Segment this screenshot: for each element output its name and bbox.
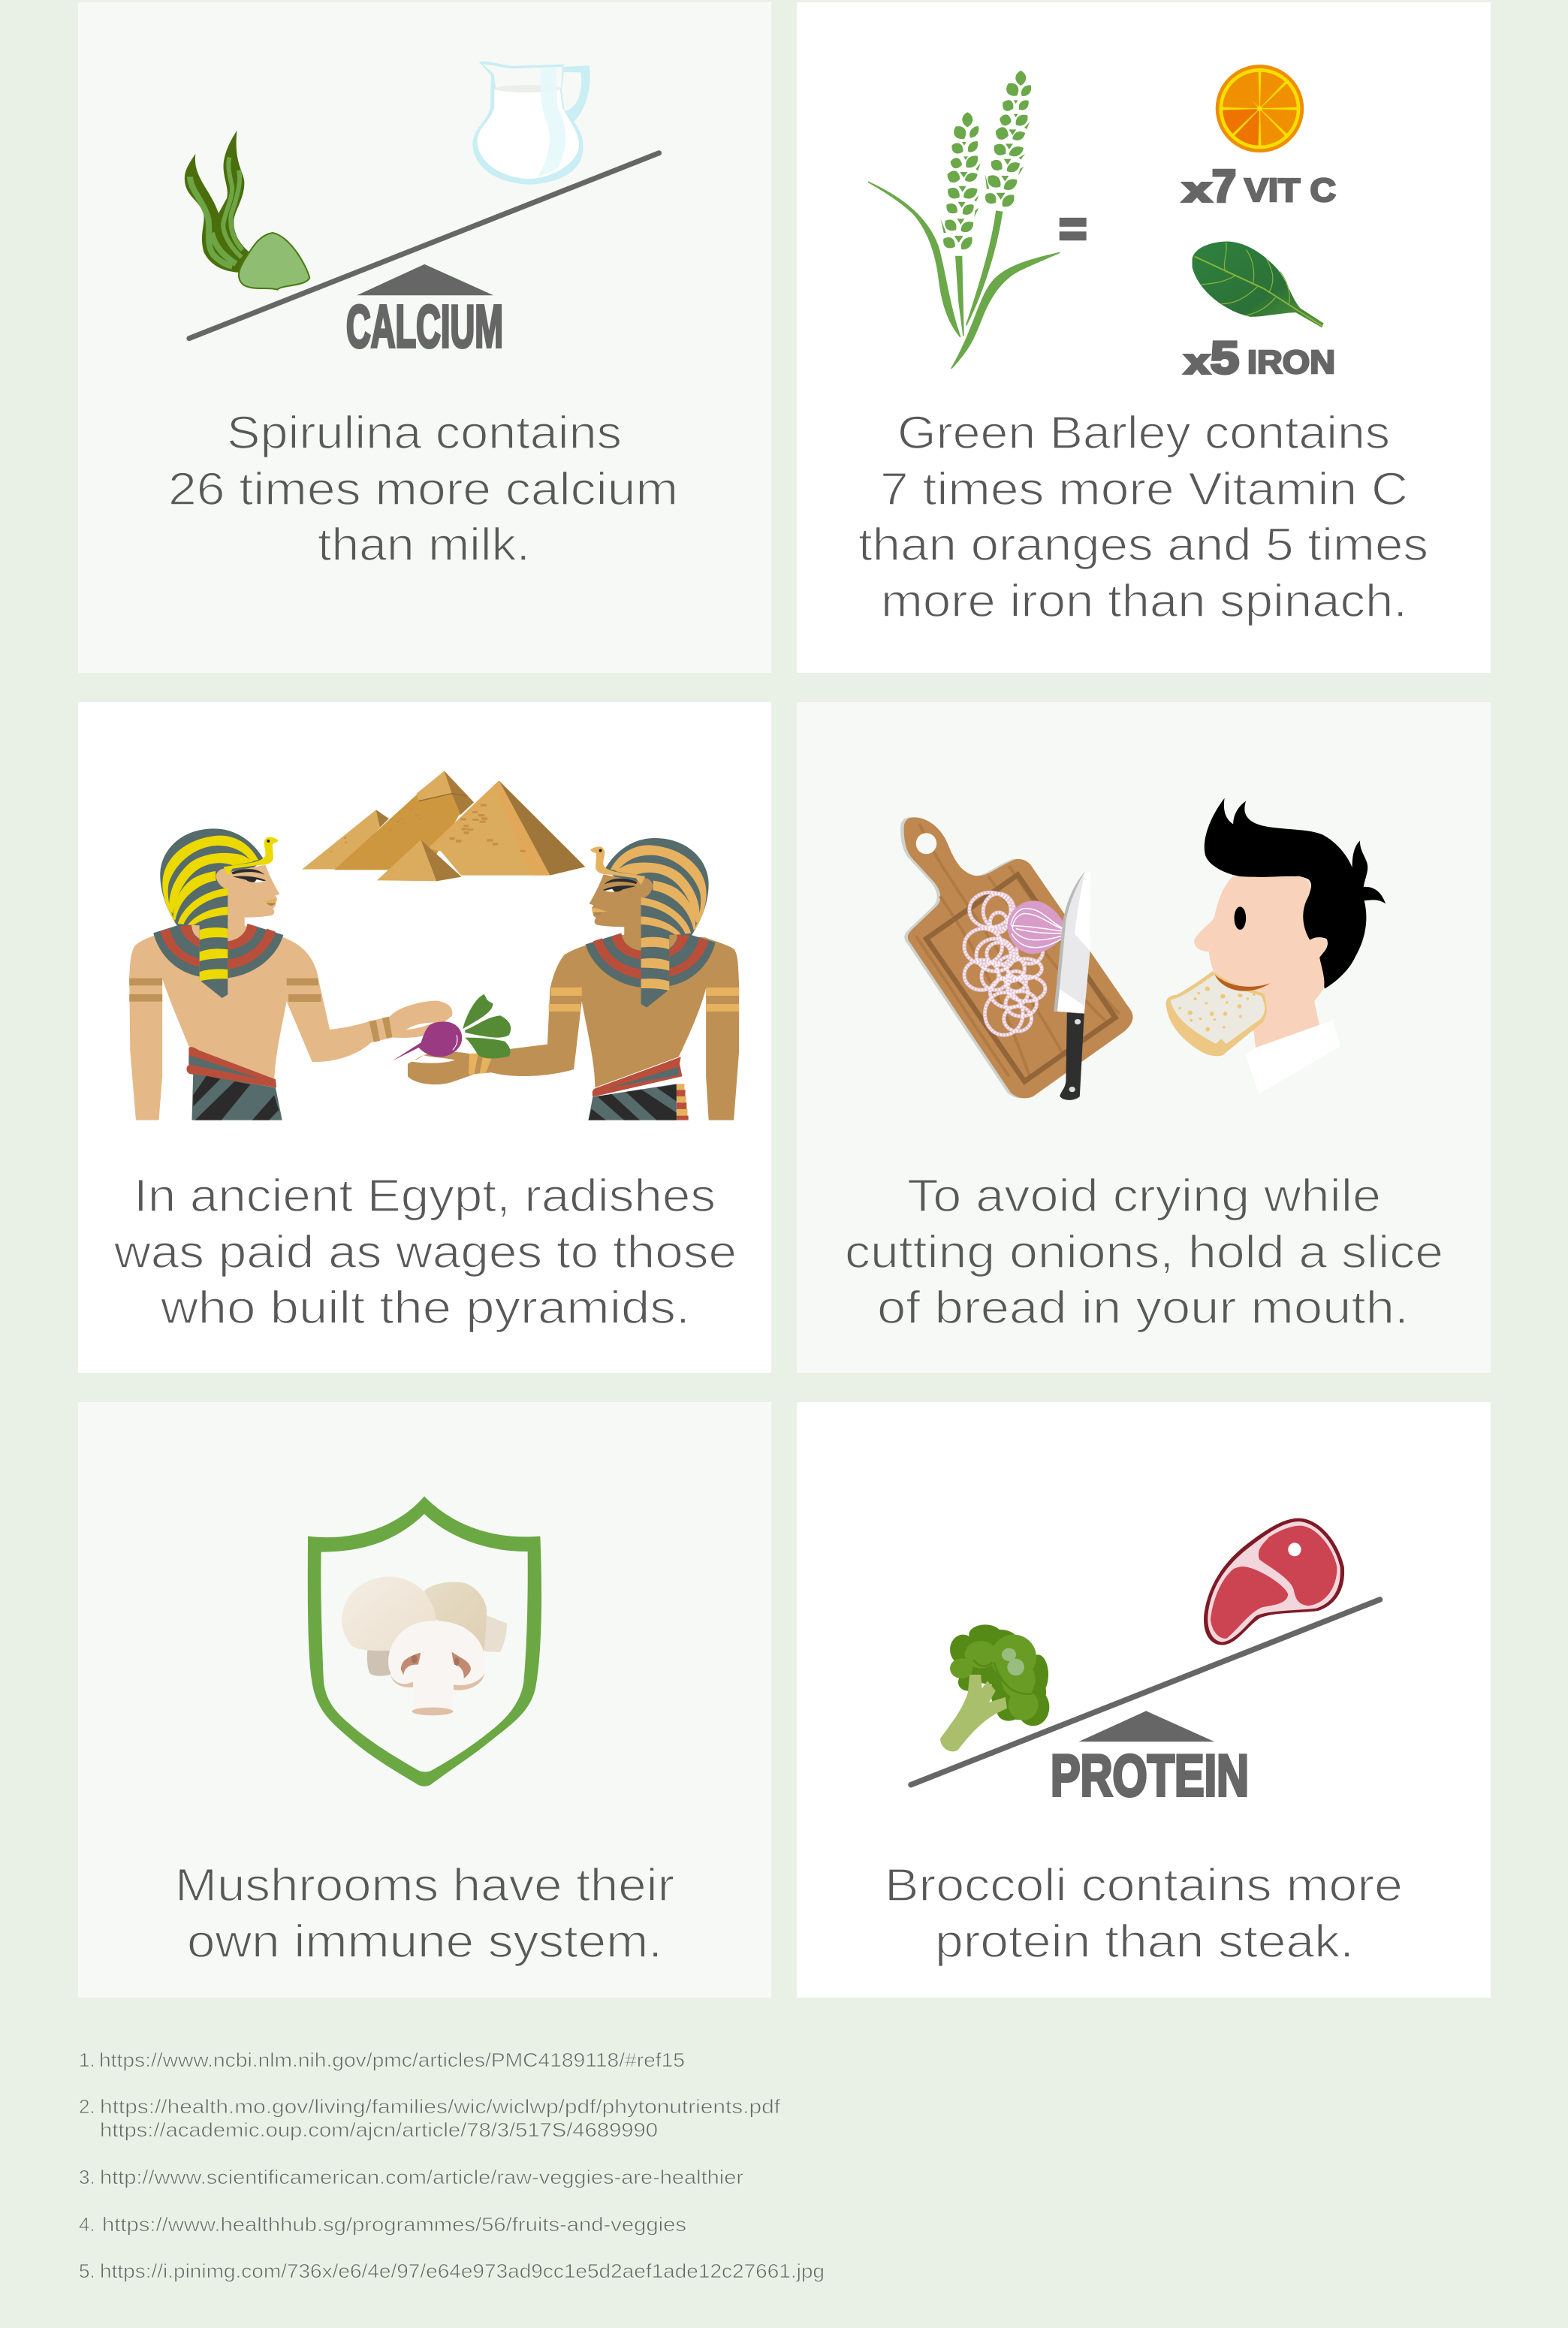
- text: spirulina fact: than milk.: [318, 519, 530, 570]
- label: x7 vit c: VIT C: [1244, 172, 1336, 209]
- label: calcium: CALCIUM: [346, 293, 503, 360]
- icon: onion rings: [964, 892, 1045, 1035]
- text: spirulina fact: [168, 407, 678, 570]
- text: mushroom fact: Mushrooms have their: [175, 1859, 674, 1910]
- label: x7 vit c: x: [1184, 170, 1211, 209]
- text: egypt fact: In ancient Egypt, radishes: [134, 1170, 716, 1221]
- icon: pharaoh right: [408, 838, 739, 1120]
- text: green barley fact: than oranges and 5 times: [858, 519, 1428, 570]
- panel: spirulina calcium: [78, 2, 771, 673]
- reference 5: https://i.pinimg.com/736x/e6/4e/97/e64e973ad9cc1e5d2aef1ade12c27661.jpg: [100, 2260, 825, 2282]
- text: broccoli fact: Broccoli contains more: [885, 1859, 1403, 1910]
- icon: barley plant: [868, 71, 1060, 369]
- icon: balance beam: [911, 1600, 1380, 1785]
- reference 1: 1.: [79, 2049, 95, 2071]
- reference 2: 2.: [79, 2095, 95, 2118]
- reference 2: https://health.mo.gov/living/families/wic/wiclwp/pdf/phytonutrients.pdf: [100, 2095, 781, 2118]
- icon: spinach leaf: [1193, 241, 1324, 327]
- panel: green barley: [797, 2, 1491, 673]
- reference 3: 3.: [79, 2166, 95, 2188]
- reference 4: https://www.healthhub.sg/programmes/56/fruits-and-veggies: [102, 2213, 686, 2236]
- panel: mushrooms: [78, 1402, 771, 1998]
- illustration: seaweed on balance beam against milk jug: [185, 62, 659, 339]
- icon: balance beam: [189, 153, 659, 339]
- text: onion fact: [845, 1170, 1443, 1333]
- label: x5 iron: x: [1185, 342, 1209, 381]
- text: mushroom fact: own immune system.: [187, 1916, 662, 1967]
- text: green barley fact: 7 times more Vitamin C: [880, 463, 1408, 514]
- icon: green shield: [308, 1496, 541, 1787]
- panel: egyptian radishes: [78, 702, 771, 1373]
- text: mushroom fact: [175, 1859, 674, 1967]
- icon: broccoli: [940, 1624, 1049, 1751]
- text: spirulina fact: 26 times more calcium: [168, 463, 678, 514]
- label: x5 iron: IRON: [1247, 344, 1335, 381]
- text: onion fact: To avoid crying while: [907, 1170, 1381, 1221]
- reference 2: [79, 2095, 781, 2141]
- icon: pyramids: [302, 771, 585, 881]
- label: x7 vit c: 7: [1212, 161, 1236, 211]
- icon: radish: [392, 994, 511, 1061]
- icon: man with bread: [1166, 798, 1386, 1094]
- text: onion fact: of bread in your mouth.: [877, 1282, 1409, 1333]
- text: broccoli fact: protein than steak.: [935, 1916, 1354, 1967]
- panel: broccoli protein: [797, 1402, 1491, 1998]
- label: x5 iron: 5: [1211, 333, 1239, 383]
- icon: cutting board: [900, 817, 1132, 1098]
- text: green barley fact: [858, 407, 1428, 626]
- text: spirulina fact: Spirulina contains: [227, 407, 622, 458]
- icon: seaweed: [185, 131, 309, 290]
- icon: steak: [1204, 1518, 1344, 1645]
- icon: mushrooms: [342, 1576, 507, 1715]
- label: x5 iron: [1185, 333, 1335, 383]
- reference 5: 5.: [79, 2260, 95, 2282]
- icon: chef knife: [1054, 872, 1091, 1100]
- panel: cutting onions: [797, 702, 1491, 1373]
- reference 1: https://www.ncbi.nlm.nih.gov/pmc/articles/PMC4189118/#ref15: [99, 2049, 685, 2071]
- reference 2: https://academic.oup.com/ajcn/article/78/3/517S/4689990: [100, 2118, 658, 2141]
- text: green barley fact: more iron than spinach.: [881, 575, 1407, 626]
- text: green barley fact: Green Barley contains: [897, 407, 1390, 458]
- icon: orange slice: [1216, 65, 1304, 152]
- text: broccoli fact: [885, 1859, 1403, 1967]
- text: egypt fact: who built the pyramids.: [160, 1282, 690, 1333]
- icon: milk jug: [472, 62, 590, 185]
- text: onion fact: cutting onions, hold a slice: [845, 1226, 1443, 1277]
- reference 4: 4.: [79, 2213, 95, 2236]
- icon: pharaoh left: [129, 828, 452, 1120]
- label: x7 vit c: [1184, 161, 1336, 211]
- icon: equals sign: [1060, 218, 1087, 240]
- text: egypt fact: [113, 1170, 737, 1333]
- icon: fulcrum triangle: [1078, 1711, 1214, 1741]
- text: egypt fact: was paid as wages to those: [113, 1226, 737, 1277]
- icon: onion half: [1007, 900, 1075, 954]
- label: protein: PROTEIN: [1051, 1742, 1249, 1808]
- references list: [79, 2049, 825, 2282]
- icon: fulcrum triangle: [357, 264, 493, 295]
- reference 3: http://www.scientificamerican.com/article/raw-veggies-are-healthier: [100, 2166, 743, 2188]
